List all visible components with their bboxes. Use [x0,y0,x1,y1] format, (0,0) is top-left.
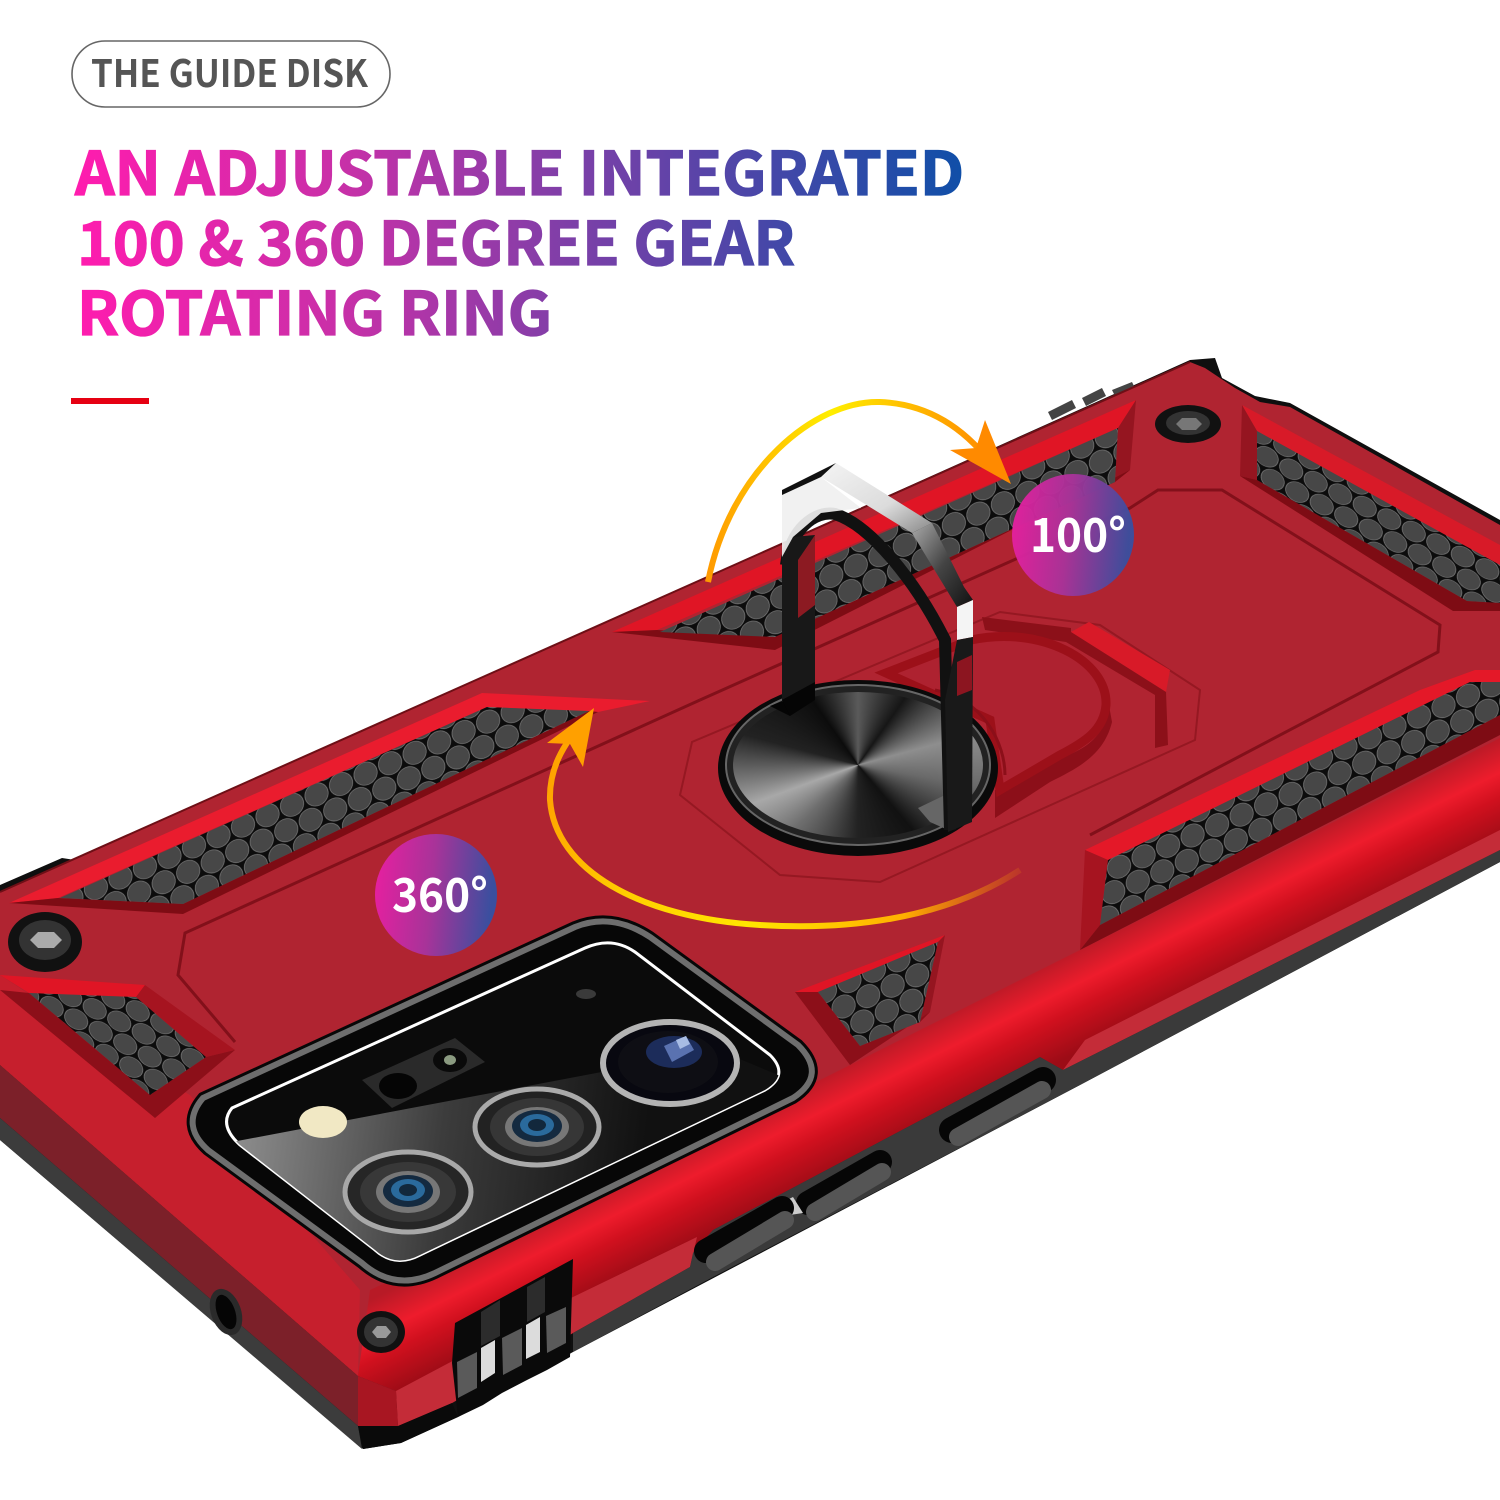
arrow: 100 degree [708,402,1011,582]
side buttons [706,1080,1043,1262]
strip: upper right honeycomb [1240,405,1500,611]
screw: bottom [357,1311,405,1353]
brushed disc face [733,692,983,838]
camera glass [227,943,779,1260]
left side wall [0,1065,358,1426]
ring lower red reflection [957,655,972,696]
flash [299,1106,347,1138]
strip: small left honeycomb [0,975,235,1118]
ring hinge left [782,682,815,716]
lower light strip right [1063,830,1500,1070]
case top edge buttons [1048,382,1136,420]
lens 1 [345,1152,471,1232]
strip: lower right honeycomb [1080,670,1500,950]
octagon bright bevel [1071,622,1170,692]
badge: 360 degrees [375,834,497,956]
glass reflection [236,1072,778,1260]
ring disc [718,680,998,856]
ring highlight [957,600,973,640]
heading: 100 & 360 DEGREE GEAR [77,196,795,283]
camera module [193,921,812,1281]
disc notch right [918,795,948,830]
mic dot [576,989,596,999]
octagon dark groove [982,617,1168,748]
ring top plate [821,463,932,533]
folding ring [782,463,973,832]
badge: 360 degrees: 360° [392,857,488,926]
ring arch band [786,513,950,830]
camera surround [193,921,812,1281]
ring left bar reflection [798,535,815,618]
audio jack [204,1284,248,1340]
strip: upper middle honeycomb [612,400,1136,650]
screw: top right [1155,405,1221,443]
case main face [0,362,1500,1426]
arrow: 360 degree [547,708,1020,926]
antenna bumper block [452,1259,573,1417]
phone case [0,358,1500,1449]
ring top black edge [782,463,836,495]
red accent line [71,398,149,404]
oval recess [886,636,1112,818]
disc notch left [770,696,795,716]
corner base [358,1403,458,1449]
heading [74,126,964,353]
lens 3 [603,1022,737,1104]
ring side plate [912,523,973,607]
badge: 100 degrees: 100° [1030,497,1126,566]
badge: 100 degrees [1012,474,1134,596]
sensor module [362,1038,485,1108]
ring left bar [782,535,815,702]
ring base octagon [680,612,1200,882]
screw: left [8,912,82,972]
gray side strip [573,850,1500,1352]
lens 2 [475,1089,599,1165]
left rim [0,975,360,1376]
recessed panel lines [178,490,1440,1042]
lower light strip left [396,1237,697,1426]
corner facet [358,1376,398,1426]
case silhouette [0,358,1500,1449]
bright front band [358,738,1500,1426]
strip: upper left honeycomb [9,693,650,914]
ring top silver inner [782,477,861,557]
left side gray strip [0,1118,362,1449]
strip: small middle honeycomb [795,935,945,1065]
heading: AN ADJUSTABLE INTEGRATED [74,126,964,213]
label pill: THE GUIDE DISK [91,43,369,98]
top edge line [0,362,1190,892]
heading: ROTATING RING [77,266,552,353]
ring lower side [945,637,973,832]
